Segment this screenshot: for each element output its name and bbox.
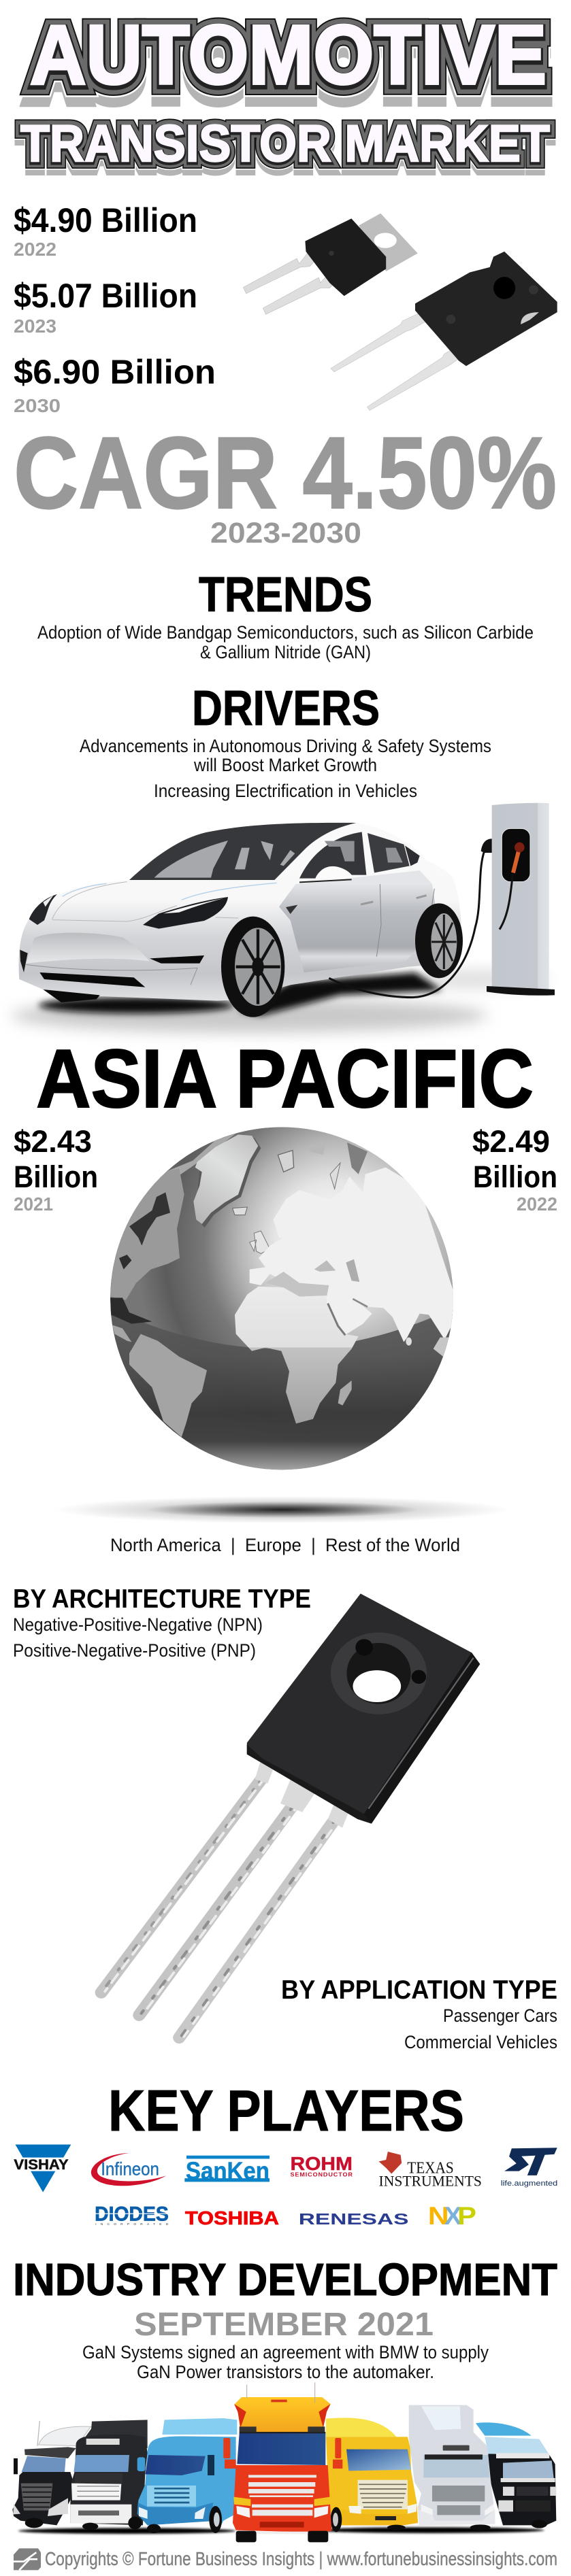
drivers text: will Boost Market Growth (193, 755, 377, 775)
logo: Toshiba: TOSHIBA (185, 2207, 279, 2228)
company logos (11, 2145, 557, 2230)
logo: ST: life.augmented (501, 2179, 557, 2188)
drivers section (80, 681, 491, 801)
market size stats (14, 201, 216, 416)
lead shoulders (255, 1758, 351, 1828)
title (20, 9, 550, 180)
continent: Central America (112, 1325, 131, 1342)
drivers text (80, 736, 491, 801)
car (19, 823, 461, 1002)
trends section (37, 568, 534, 662)
logo: Texas Instruments: TEXAS (407, 2158, 454, 2177)
development text (82, 2342, 489, 2382)
logo: NXP (428, 2202, 476, 2230)
nose and bumper (20, 933, 204, 1002)
footer (14, 2548, 557, 2570)
door panels (279, 870, 436, 972)
continent: North America (110, 1168, 184, 1300)
application heading: BY APPLICATION TYPE (281, 1976, 557, 2005)
continent: South America (129, 1334, 207, 1437)
Asia Pacific heading: ASIA PACIFIC (36, 1032, 534, 1125)
truck: dark right (476, 2422, 556, 2528)
Red Sea (328, 1304, 345, 1335)
truck: black and white (70, 2420, 148, 2530)
architecture items: Positive-Negative-Positive (PNP) (13, 1640, 256, 1661)
application items (404, 2005, 557, 2052)
title line: AUTOMOTIVE: AUTOMOTIVE (30, 11, 546, 104)
badge and handles (286, 884, 434, 957)
transistor body (247, 1593, 480, 1824)
trends text (37, 622, 534, 662)
continent: Baffin and Arctic islands (168, 1134, 236, 1175)
logo: Sanken: SanKen (186, 2158, 270, 2185)
charger assembly (329, 803, 555, 998)
windshield reflections (154, 841, 295, 878)
continent: Franz Josef Land (308, 1141, 325, 1155)
logo: Diodes: INCORPORATED (95, 2222, 169, 2226)
continent: Svalbard (278, 1151, 294, 1172)
truck: yellow (326, 2418, 418, 2532)
stat 2023 year: 2023 (14, 316, 56, 337)
trucks on the right (326, 2405, 556, 2532)
continent: Siberia north (347, 1142, 368, 1174)
globe floor shadow (54, 1496, 510, 1523)
hood lines (52, 882, 277, 921)
other regions list: North America | Europe | Rest of the World (110, 1535, 460, 1555)
application type segment (281, 1976, 557, 2052)
continent: Iceland (233, 1207, 247, 1215)
architecture items: Negative-Positive-Negative (NPN) (13, 1614, 263, 1635)
application items: Commercial Vehicles (404, 2032, 557, 2052)
Asia Pacific 2021 value: $2.43 (14, 1124, 92, 1159)
Mediterranean Sea (265, 1272, 329, 1297)
Caspian Sea (346, 1259, 359, 1282)
architecture heading: BY ARCHITECTURE TYPE (13, 1584, 311, 1614)
continent: Novaya Zemlya (330, 1163, 340, 1189)
stat 2022 year: 2022 (14, 239, 56, 260)
truck: red and yellow centre (223, 2382, 342, 2542)
Asia Pacific 2022 value: Billion (473, 1159, 557, 1194)
side windows (299, 832, 420, 879)
logo: Rohm: ROHM (290, 2154, 353, 2175)
title line: AUTOMOTIVE: AUTOMOTIVE (30, 11, 546, 104)
Asia Pacific 2021 value: 2021 (14, 1193, 53, 1215)
development date: SEPTEMBER 2021 (134, 2307, 434, 2343)
title line: AUTOMOTIVE: AUTOMOTIVE (30, 11, 546, 104)
development text: GaN Power transistors to the automaker. (137, 2362, 434, 2382)
ground shadow (12, 970, 549, 1032)
drivers heading: DRIVERS (192, 681, 380, 736)
title line: AUTOMOTIVE: AUTOMOTIVE (30, 11, 546, 104)
truck fleet illustration (12, 2382, 556, 2542)
architecture items (13, 1614, 263, 1661)
architecture type segment (13, 1584, 311, 1661)
car body (19, 823, 461, 1001)
Asia Pacific 2022 value: 2022 (517, 1193, 557, 1215)
Gulf of Mexico (110, 1298, 152, 1324)
trends heading: TRENDS (199, 568, 372, 622)
title line: AUTOMOTIVE: AUTOMOTIVE (30, 22, 546, 116)
logo: NXP: P (457, 2202, 476, 2230)
stat 2030 value: $6.90 Billion (14, 353, 216, 391)
logo: Infineon: Infineon (101, 2159, 159, 2180)
headlights (29, 894, 228, 929)
drivers text: Increasing Electrification in Vehicles (154, 781, 417, 801)
logo: Infineon (91, 2153, 166, 2186)
door mirror (316, 866, 352, 879)
Sri Lanka (406, 1338, 412, 1346)
truck: white (409, 2405, 495, 2530)
logo: Diodes: DIODES (95, 2203, 169, 2225)
icon: three-lead transistor (101, 1593, 480, 2037)
application items: Passenger Cars (443, 2005, 557, 2026)
logo: ST (501, 2148, 557, 2188)
Asia Pacific 2021 value: Billion (14, 1159, 98, 1194)
charging station (481, 803, 555, 996)
globe illustration (110, 1127, 456, 1471)
front wheel (221, 917, 284, 1017)
truck: blue (137, 2418, 237, 2533)
Great Lakes (119, 1255, 131, 1270)
development text: GaN Systems signed an agreement with BMW to supply (82, 2342, 489, 2362)
continent: Africa (235, 1287, 359, 1423)
Southeast Asia (434, 1338, 453, 1358)
continent: British Isles (250, 1231, 270, 1253)
globe sphere (110, 1127, 456, 1471)
continent: Greenland (193, 1134, 258, 1224)
logo: NXP: X (444, 2202, 462, 2230)
icon: two power transistors (243, 214, 557, 411)
truck: dark far left (12, 2421, 91, 2528)
logo: Vishay: VISHAY (14, 2156, 69, 2172)
continent: Greenland shadow (196, 1137, 261, 1227)
small transistor (243, 214, 418, 314)
Black Sea (314, 1260, 336, 1272)
logo: Texas Instruments: INSTRUMENTS (379, 2173, 482, 2190)
stat 2022 value: $4.90 Billion (14, 201, 197, 239)
Asia Pacific 2022 value: $2.49 (472, 1124, 550, 1159)
stat 2023 value: $5.07 Billion (14, 277, 197, 315)
logo: Texas Instruments (379, 2152, 482, 2190)
car and charger illustration (12, 803, 555, 1032)
continent: Eurasia (250, 1168, 456, 1342)
Asia Pacific 2022 value (472, 1124, 557, 1215)
key players heading: KEY PLAYERS (108, 2079, 464, 2143)
Asia Pacific 2021 value (14, 1124, 98, 1215)
footer logo (14, 2548, 41, 2570)
ground shadow (18, 2527, 544, 2534)
logo: Renesas: RENESAS (299, 2211, 408, 2228)
leads (101, 1776, 342, 2037)
logo: NXP: N (428, 2202, 449, 2230)
charging cable (329, 851, 485, 998)
Hudson Bay (129, 1192, 170, 1246)
logo: Rohm: SEMICONDUCTOR (290, 2171, 353, 2178)
trends text: & Gallium Nitride (GAN) (200, 642, 371, 662)
CAGR period: 2023-2030 (210, 517, 361, 549)
Madagascar (338, 1380, 352, 1406)
rear wheel (415, 903, 463, 978)
title line: AUTOMOTIVE: AUTOMOTIVE (30, 9, 546, 102)
Persian Gulf (353, 1299, 368, 1307)
drivers text: Advancements in Autonomous Driving & Safety Systems (80, 736, 491, 756)
large transistor (331, 252, 557, 411)
stat 2030 year: 2030 (14, 395, 61, 416)
logo: Vishay (11, 2145, 75, 2192)
roof and windshield (129, 823, 356, 880)
